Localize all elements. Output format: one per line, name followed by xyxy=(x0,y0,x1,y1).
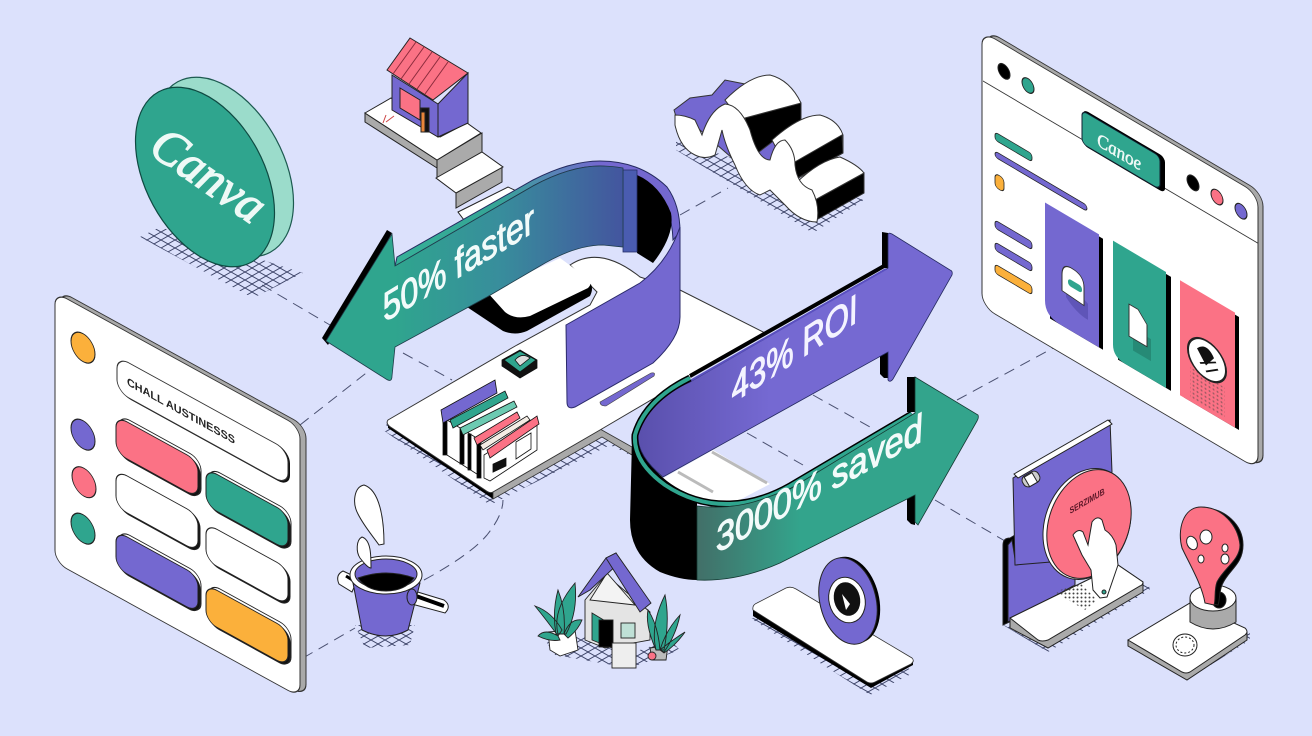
icon: Canva coin xyxy=(107,54,322,298)
search field xyxy=(117,356,290,488)
icon: pink paddle on cylinder xyxy=(1128,507,1250,680)
platform: central isometric desk xyxy=(383,257,765,505)
icon: hand and pink dial on tablet xyxy=(1003,420,1150,652)
folder stack xyxy=(441,380,539,481)
panel: right browser window xyxy=(982,27,1263,472)
tab label: Canoe xyxy=(1097,128,1141,176)
icon: cooking pot with steam xyxy=(338,485,448,648)
floating card behind arrow xyxy=(467,258,592,334)
arrow label: 50% faster xyxy=(378,198,539,331)
arrow label: 3000% saved xyxy=(713,407,927,562)
arrow label: 43% ROI xyxy=(728,288,861,412)
arrow: purple U-turn front xyxy=(566,227,680,408)
arrow: 3000% saved back wall xyxy=(630,440,697,580)
status dots xyxy=(71,327,96,550)
Canva logo wordmark: Canva xyxy=(141,116,277,234)
template card: teal xyxy=(1113,241,1171,391)
Canva tab xyxy=(1082,108,1165,193)
icon: storefront on steps xyxy=(365,38,525,228)
sidebar lines xyxy=(995,132,1087,327)
icon: phone plate with disc xyxy=(750,551,915,695)
small teal box xyxy=(502,350,537,378)
floor strip under right U-turn xyxy=(660,450,770,505)
dashed connectors xyxy=(262,188,1053,658)
arrow: 50% faster xyxy=(322,161,680,380)
option buttons xyxy=(116,413,291,669)
purple slot xyxy=(600,373,655,406)
dial label: SERZIMUB xyxy=(1069,486,1105,516)
arrow: 43% ROI xyxy=(638,232,952,477)
icon: ribbon wave xyxy=(674,75,864,233)
panel: left app screen xyxy=(55,288,306,700)
template card: pink xyxy=(1180,280,1239,430)
template card: purple xyxy=(1045,203,1103,350)
window dots xyxy=(998,61,1247,222)
arrow: 3000% saved xyxy=(635,377,978,580)
icon: small house with plants xyxy=(535,553,685,668)
search field label: CHALL AUSTINESSS xyxy=(127,375,235,447)
